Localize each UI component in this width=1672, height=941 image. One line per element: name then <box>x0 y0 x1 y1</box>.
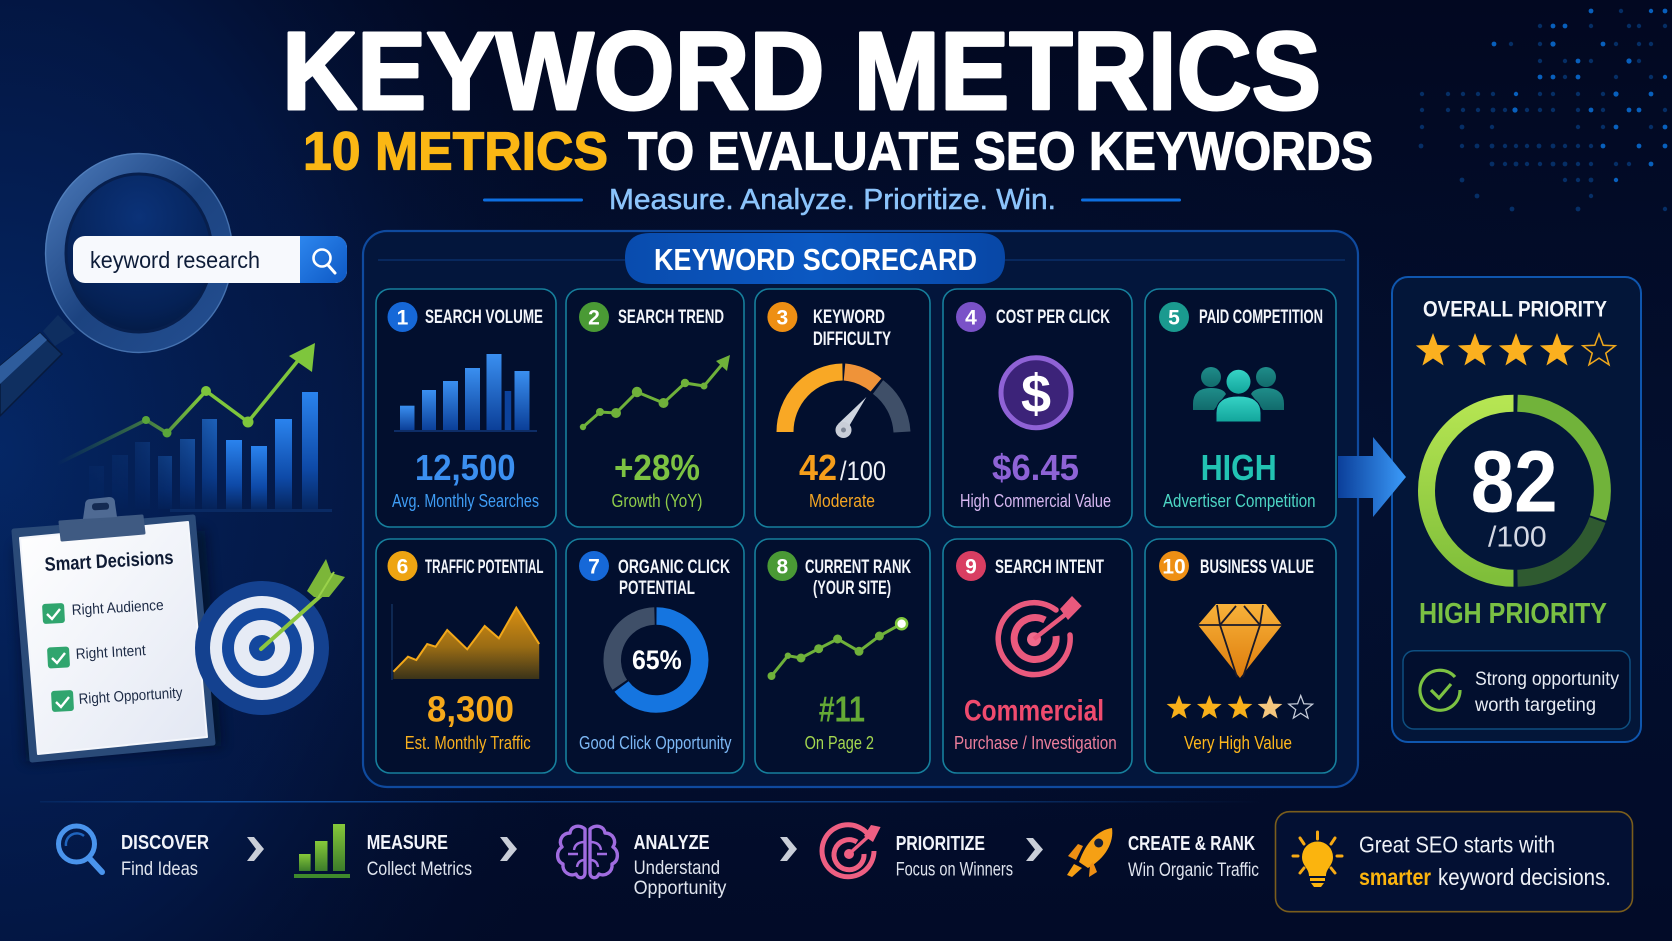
verdict box: worth targeting <box>1474 695 1596 716</box>
scorecard banner <box>625 233 1005 284</box>
step: discover: DISCOVER <box>121 832 209 854</box>
panel: overall priority <box>1392 277 1641 742</box>
arrow to overall priority <box>1338 437 1406 517</box>
card 1: search volume <box>376 289 556 527</box>
card 9: search intent <box>943 539 1132 773</box>
heading: smart decisions: Smart Decisions <box>44 547 174 576</box>
card 4: cost per click: High Commercial Value <box>960 491 1111 511</box>
card 6: traffic potential: Est. Monthly Traffic <box>405 733 531 753</box>
icon: light bulb <box>1293 832 1342 887</box>
checklist items: Right Intent <box>75 642 147 663</box>
bar chart <box>394 354 537 431</box>
card 4: cost per click <box>943 289 1132 527</box>
callout: smarter decisions: smarter <box>1359 864 1431 890</box>
area chart <box>392 604 539 680</box>
card 2: search trend: 2 <box>588 306 600 330</box>
card 8: current rank: CURRENT RANK <box>805 557 911 578</box>
step: analyze: Opportunity <box>634 878 727 899</box>
scorecard banner: KEYWORD SCORECARD <box>654 242 977 277</box>
card 8: current rank <box>755 539 930 773</box>
chevron <box>500 837 517 861</box>
card 6: traffic potential: 8,300 <box>427 689 514 730</box>
card 9: search intent: SEARCH INTENT <box>995 557 1104 578</box>
card 8: current rank: On Page 2 <box>805 733 874 753</box>
title: KEYWORD METRICS <box>282 10 1321 133</box>
icon: dollar coin: $ <box>1021 364 1051 424</box>
subtitle: 10 METRICS <box>303 122 608 182</box>
checklist items <box>42 597 183 712</box>
card 2: search trend: +28% <box>614 447 700 488</box>
card 5: paid competition <box>1145 289 1336 527</box>
step: discover: Find Ideas <box>121 859 198 880</box>
card 5: paid competition: PAID COMPETITION <box>1199 307 1323 328</box>
step: discover <box>58 826 209 880</box>
card 10: business value: BUSINESS VALUE <box>1200 557 1314 578</box>
step: analyze: Understand <box>634 858 720 879</box>
illustration: magnifying glass with search bar <box>0 154 347 416</box>
card 6: traffic potential <box>376 539 556 773</box>
step: create and rank <box>1067 828 1259 881</box>
step: create and rank: CREATE & RANK <box>1128 833 1255 855</box>
gauge <box>785 372 902 438</box>
card 9: search intent: Commercial <box>964 695 1104 728</box>
score value: 82 <box>1471 434 1558 531</box>
card 3: keyword difficulty: 42 <box>799 447 837 488</box>
card 3: keyword difficulty: DIFFICULTY <box>813 329 891 350</box>
card 1: search volume: SEARCH VOLUME <box>425 307 543 328</box>
icon: target <box>998 596 1082 675</box>
card 3: keyword difficulty: Moderate <box>809 491 875 511</box>
card 7: organic click potential <box>566 539 744 773</box>
callout: smarter decisions: Great SEO starts with <box>1359 832 1555 858</box>
card 3: keyword difficulty: KEYWORD <box>813 307 885 328</box>
card 3: keyword difficulty <box>755 289 930 527</box>
verdict box: Strong opportunity <box>1475 669 1619 690</box>
tagline: Measure. Analyze. Prioritize. Win. <box>609 184 1056 216</box>
step: prioritize <box>822 825 1013 881</box>
card 7: organic click potential: Good Click Opportunity <box>579 733 732 753</box>
card 2: search trend: SEARCH TREND <box>618 307 724 328</box>
step: create and rank: Win Organic Traffic <box>1128 860 1259 881</box>
card 6: traffic potential: 6 <box>397 556 408 578</box>
chevron <box>247 837 264 861</box>
icon: diamond <box>1198 604 1282 678</box>
illustration: growth bar chart with arrow <box>57 343 332 512</box>
rank line chart <box>768 618 907 680</box>
rating stars <box>1167 695 1313 719</box>
step: analyze <box>558 826 727 899</box>
card 3: keyword difficulty: /100 <box>840 456 886 486</box>
step: measure: Collect Metrics <box>367 859 472 880</box>
card 5: paid competition: Advertiser Competition <box>1163 491 1316 511</box>
card 7: organic click potential: 7 <box>588 556 600 578</box>
priority label: HIGH PRIORITY <box>1419 598 1607 630</box>
card 8: current rank: 8 <box>777 556 789 578</box>
card 6: traffic potential: TRAFFIC POTENTIAL <box>425 557 544 578</box>
line chart <box>580 355 730 430</box>
card 7: organic click potential: ORGANIC CLICK <box>618 557 730 578</box>
decorative dot grid <box>1419 9 1667 211</box>
card 1: search volume: 1 <box>397 306 409 330</box>
card 7: organic click potential: POTENTIAL <box>619 578 695 599</box>
illustration: clipboard checklist <box>14 497 222 762</box>
subtitle <box>303 122 1373 182</box>
chevron <box>780 837 797 861</box>
card 8: current rank: #11 <box>819 689 865 730</box>
step: measure: MEASURE <box>367 832 448 854</box>
card 5: paid competition: HIGH <box>1201 447 1277 488</box>
card 2: search trend: Growth (YoY) <box>612 491 702 511</box>
card 3: keyword difficulty: 3 <box>777 306 788 330</box>
score ring <box>1426 403 1602 578</box>
panel: keyword scorecard <box>363 231 1358 787</box>
card 4: cost per click: $6.45 <box>992 447 1079 488</box>
card 4: cost per click: COST PER CLICK <box>996 307 1110 328</box>
card 2: search trend <box>566 289 744 527</box>
step: prioritize: Focus on Winners <box>896 860 1013 881</box>
priority stars <box>1416 333 1615 366</box>
donut chart: 65% <box>632 645 682 675</box>
card 1: search volume: Avg. Monthly Searches <box>392 491 539 511</box>
subtitle: TO EVALUATE SEO KEYWORDS <box>628 122 1373 182</box>
search bar: keyword research <box>90 247 260 273</box>
tagline <box>483 184 1181 216</box>
card 9: search intent: 9 <box>965 556 977 578</box>
card 5: paid competition: 5 <box>1168 306 1180 330</box>
donut chart <box>612 616 700 704</box>
card 8: current rank: (YOUR SITE) <box>813 578 891 599</box>
step: prioritize: PRIORITIZE <box>896 833 985 855</box>
checklist items: Right Audience <box>71 597 164 619</box>
score value: /100 <box>1488 522 1547 554</box>
icon: people group <box>1193 367 1284 422</box>
card 10: business value: Very High Value <box>1184 733 1292 753</box>
illustration: target with dart <box>195 559 345 715</box>
step: analyze: ANALYZE <box>634 832 710 854</box>
chevron <box>1026 838 1043 861</box>
card 10: business value: 10 <box>1162 556 1186 578</box>
heading: OVERALL PRIORITY <box>1423 297 1607 322</box>
checklist items: Right Opportunity <box>78 684 183 708</box>
card 4: cost per click: 4 <box>965 306 977 330</box>
card 9: search intent: Purchase / Investigation <box>954 733 1117 753</box>
search bar <box>73 236 347 283</box>
icon: dollar coin <box>1001 358 1071 428</box>
card 10: business value <box>1145 539 1336 773</box>
callout: smarter decisions <box>1276 812 1632 912</box>
card 1: search volume: 12,500 <box>415 447 516 488</box>
callout: smarter decisions: keyword decisions. <box>1438 864 1611 890</box>
verdict box <box>1403 651 1630 729</box>
bottom process row <box>40 801 1260 899</box>
step: measure <box>294 824 472 880</box>
